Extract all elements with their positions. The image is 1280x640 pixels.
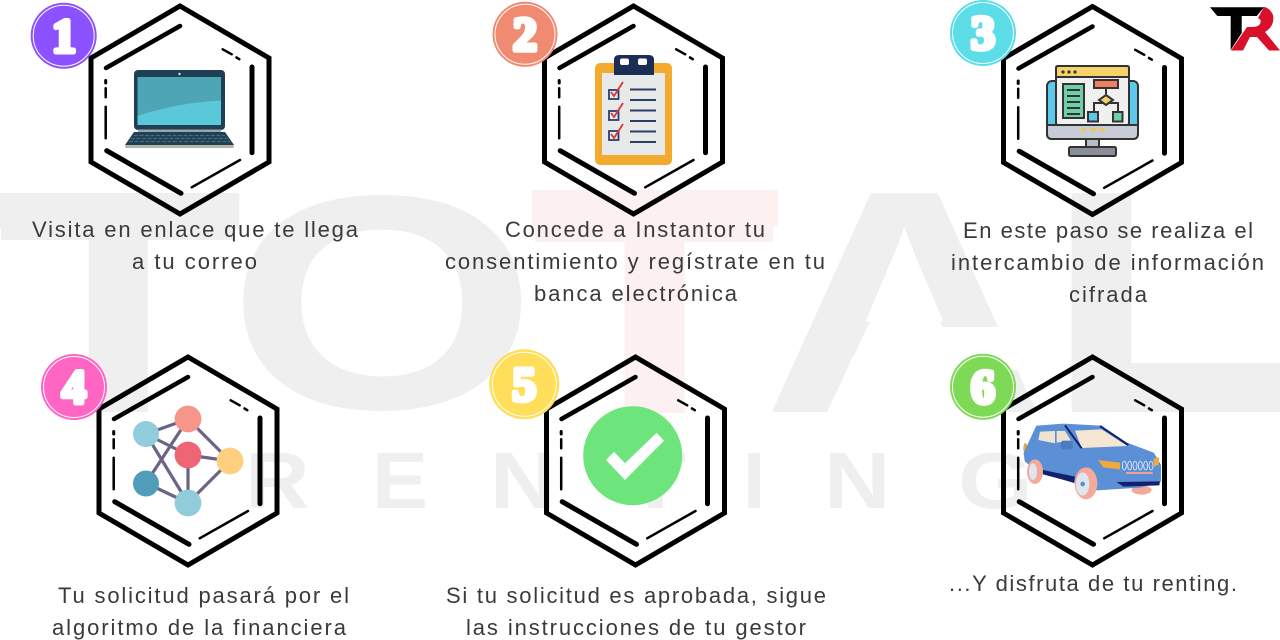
icon: monitor with flowchart [1047, 66, 1138, 156]
text step 4: algoritmo de la financiera [52, 615, 347, 640]
watermark word: TOTAL: O [227, 133, 538, 473]
badge 4 [41, 354, 107, 420]
text step 5: las instrucciones de tu gestor [466, 615, 806, 640]
badge 3: 3 [971, 7, 995, 60]
badge 2 [492, 2, 558, 67]
badge 6: 6 [971, 361, 995, 414]
watermark word: RENTING: T [625, 436, 686, 526]
badge 1 [31, 3, 97, 69]
hexagon frame 1 [91, 6, 269, 214]
watermark word: RENTING: G [958, 436, 1033, 525]
text step 2: consentimiento y regístrate en tu [445, 249, 825, 274]
icon: network nodes [133, 406, 243, 516]
hexagon frame 2 [544, 6, 722, 214]
text step 3: En este paso se realiza el [963, 218, 1253, 243]
hexagon frame 5 [546, 357, 724, 565]
watermark word: RENTING [245, 435, 1033, 526]
watermark word: TOTAL: T [527, 120, 782, 482]
step 4 [41, 354, 357, 640]
text step 4: Tu solicitud pasará por el [58, 583, 349, 608]
step 6 [949, 354, 1237, 596]
text step 2: Concede a Instantor tu [505, 217, 765, 242]
watermark word: RENTING: N [824, 437, 890, 526]
watermark word: TOTAL: T [0, 124, 244, 480]
step 5 [446, 349, 834, 640]
hexagon frame 3 [1004, 6, 1182, 214]
logo: TR [1210, 7, 1280, 50]
badge 3 [950, 0, 1016, 66]
text step 2: banca electrónica [534, 281, 738, 306]
text step 1: Visita en enlace que te llega [32, 217, 359, 242]
watermark word: RENTING: R [245, 435, 310, 525]
icon: laptop [125, 70, 234, 148]
step 1 [31, 3, 366, 274]
step 3 [950, 0, 1272, 307]
watermark word: RENTING: I [743, 436, 765, 525]
text step 3: cifrada [1069, 282, 1148, 307]
text step 6: ...Y disfruta de tu renting. [949, 571, 1237, 596]
watermark word: RENTING: E [372, 437, 428, 526]
badge 2: 2 [513, 8, 537, 62]
watermark word: TOTAL [0, 120, 1280, 482]
icon: green check [583, 406, 682, 505]
badge 5: 5 [512, 358, 536, 412]
hexagon frame 6 [1004, 357, 1182, 565]
step 2 [445, 2, 833, 306]
text step 1: a tu correo [132, 249, 257, 274]
badge 5 [489, 349, 559, 419]
badge 1: 1 [52, 10, 76, 63]
text step 5: Si tu solicitud es aprobada, sigue [446, 583, 826, 608]
icon: clipboard checklist [595, 55, 672, 165]
background watermark: TOTAL RENTING [0, 120, 1280, 526]
watermark word: RENTING: N [490, 437, 556, 526]
badge 4: 4 [62, 361, 86, 414]
hexagon frame 4 [99, 357, 277, 565]
watermark word: TOTAL: A [762, 124, 1047, 479]
text step 3: intercambio de información [951, 250, 1264, 275]
badge 6 [950, 354, 1016, 420]
icon: blue car [1023, 425, 1160, 499]
